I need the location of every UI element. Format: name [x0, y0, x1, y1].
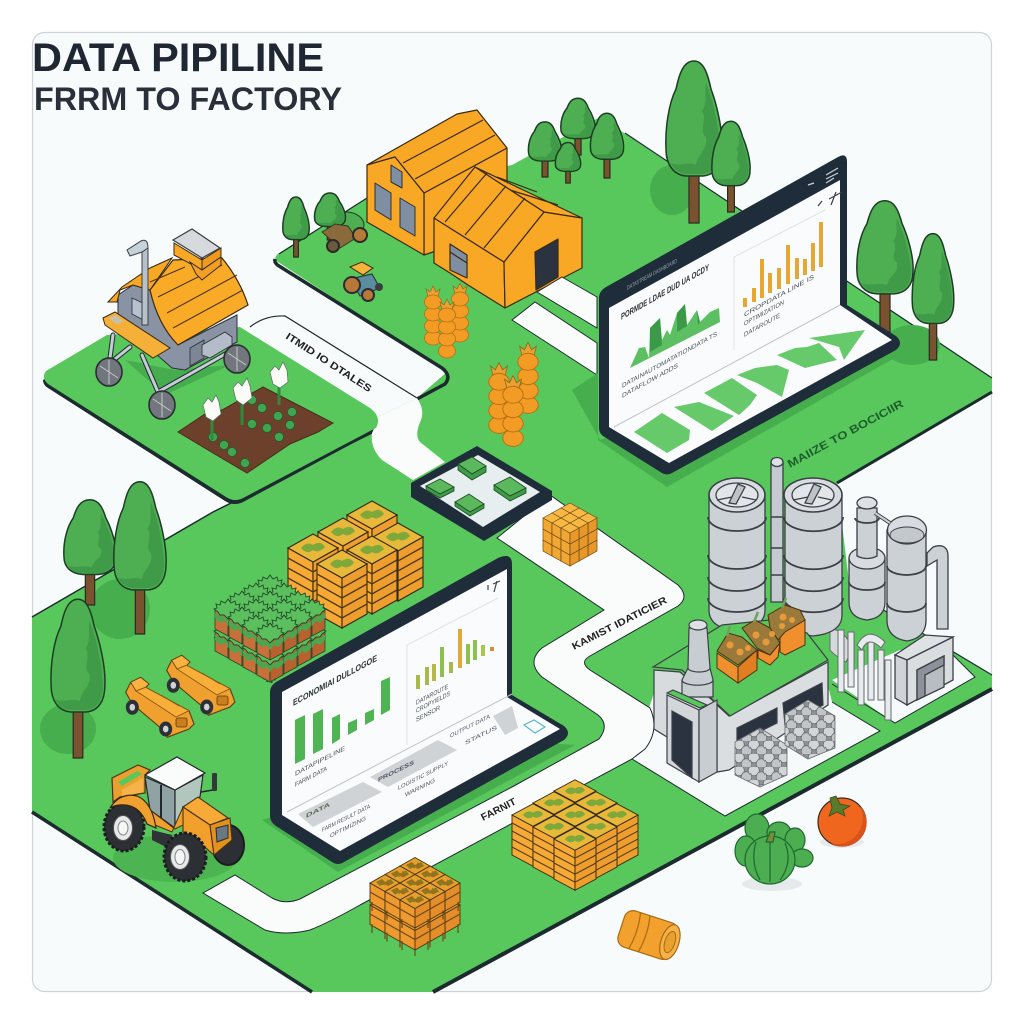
laptop frame — [599, 155, 900, 475]
factory white pads — [632, 650, 975, 816]
road: tray to factory and farm lane — [203, 495, 684, 933]
chart captions: CROPDATA LINE IS — [744, 274, 814, 319]
road label: market: KAMIST IDATICIER — [570, 595, 670, 653]
platform — [103, 312, 170, 358]
barn gable wall — [367, 157, 424, 255]
shed gable wall — [504, 212, 582, 308]
chart captions: DATAROUTE — [416, 684, 448, 707]
trees right — [857, 201, 954, 360]
chart title: ECONOMIAI DULLOGOE — [293, 653, 377, 709]
trees lower left — [51, 482, 166, 758]
laptop dashboard upper right — [572, 155, 905, 487]
elbow pipe — [927, 546, 948, 629]
door module — [667, 695, 699, 782]
chart captions: CROPYIELDS — [416, 690, 450, 715]
green roof — [653, 620, 828, 716]
chart captions — [295, 684, 450, 789]
barn: gabled farm building — [367, 110, 582, 308]
title: DATA PIPILINE — [32, 36, 324, 80]
chart captions: SENSOR — [416, 705, 440, 724]
pad outlines — [632, 655, 975, 816]
laptop screen — [282, 569, 560, 851]
cobble stacks — [735, 700, 835, 787]
soil plot — [178, 362, 333, 473]
rear fender — [110, 795, 156, 828]
shed door — [535, 239, 558, 290]
crates on roof — [717, 598, 805, 683]
chart captions — [622, 274, 814, 400]
wheel legs — [110, 335, 227, 392]
right plant base — [895, 635, 953, 705]
green area chart — [630, 304, 720, 368]
white service lanes at barn — [512, 277, 597, 375]
icon: orange barrel — [615, 908, 684, 963]
cab glass — [145, 777, 175, 828]
icon: cabbage — [735, 814, 813, 891]
icon: tomato — [818, 796, 867, 848]
chimney — [682, 628, 713, 697]
tank two — [784, 478, 843, 636]
land dark edges — [32, 133, 992, 992]
rear wheel — [104, 803, 144, 851]
window icons — [808, 168, 838, 185]
road label: farm lane: FARNIT — [479, 797, 518, 824]
laptop dashboard lower: PROCESS — [378, 759, 414, 784]
main roof — [150, 258, 248, 345]
farm robot house — [96, 229, 250, 419]
laptop dashboard lower: OPTIMIZING — [330, 815, 366, 840]
laptop dashboard lower: STATUS — [465, 724, 497, 747]
eave roof — [108, 258, 172, 302]
hood — [183, 797, 228, 825]
orange cargo vehicles — [126, 655, 235, 737]
tank one — [708, 478, 766, 631]
small orange tractor — [344, 262, 383, 301]
laptop dashboard lower: WARNING — [405, 777, 435, 799]
chart captions: DATAPIPELINE — [295, 745, 345, 778]
header text: DATASTREAM DASHBOARD — [627, 258, 677, 292]
laptop dashboard lower: OUTPUT DATA — [450, 713, 491, 740]
road: farm to sorting tray — [372, 398, 445, 480]
chart captions: DATAROUTE — [744, 312, 780, 339]
window icons — [488, 581, 500, 592]
big tractor — [104, 757, 244, 882]
laptop dashboard lower: FARM RESULT DATA — [322, 803, 371, 834]
house walls — [118, 285, 237, 370]
front wheel — [164, 833, 206, 881]
chart captions: FARM DATA — [295, 765, 327, 789]
wheels — [96, 345, 250, 419]
rear rack — [112, 765, 150, 802]
farm platform — [43, 327, 378, 504]
centre pipe — [771, 458, 783, 602]
road label: farm: ITMID IO DTALES — [283, 331, 374, 395]
laptop dashboard lower — [262, 556, 575, 872]
tree cluster top — [528, 98, 624, 183]
small trees near barn — [283, 193, 364, 257]
chimney pipe — [142, 248, 148, 325]
chart captions: DATAINAUTOMATATIONDATA TS — [622, 331, 717, 390]
shed rear roof — [475, 167, 582, 218]
tank three — [849, 497, 890, 620]
orange bar chart — [745, 222, 821, 307]
hay bale block lower — [512, 780, 638, 890]
silo and processing plant — [708, 458, 953, 720]
roof box — [174, 243, 202, 270]
hay bale stack — [288, 501, 423, 628]
shed main roof — [434, 167, 544, 262]
small tractor behind — [322, 224, 367, 252]
mirror — [201, 790, 213, 792]
green bar chart — [295, 677, 390, 764]
tree shadows — [40, 165, 940, 754]
chart title: PORMDE LDAE DUD UA OCDY — [621, 262, 709, 323]
carrot stacks — [424, 283, 538, 446]
shed side wall — [434, 218, 505, 308]
tank four — [887, 516, 926, 641]
title — [32, 36, 342, 117]
chassis — [150, 807, 183, 832]
laptop dashboard lower: LOGISTIC SUPPLY — [398, 760, 449, 792]
green process tiles — [634, 330, 865, 453]
chart captions: DATAFLOW ADDS — [622, 362, 678, 400]
small blue box — [524, 720, 545, 733]
laptop dashboard lower: DATA — [306, 801, 331, 820]
road label: maize: MAIIZE TO BOCICIIR — [786, 398, 906, 471]
process pipework — [830, 628, 891, 720]
crate stack on lane — [370, 858, 460, 956]
laptop frame — [270, 556, 568, 864]
cab roof — [145, 757, 205, 790]
leafy produce crates — [214, 575, 326, 682]
chart captions: OPTIMIZATION — [744, 299, 784, 328]
tall trees top — [666, 61, 750, 223]
far wheel — [212, 825, 244, 865]
orange cube stack — [543, 503, 597, 566]
subtitle: FRRM TO FACTORY — [34, 81, 342, 117]
mixed bar chart — [418, 629, 492, 689]
barn side wall — [424, 148, 507, 255]
factory building — [653, 620, 828, 782]
barn roof — [367, 110, 507, 193]
sorting tray — [411, 446, 552, 541]
laptop screen — [609, 180, 892, 463]
roll-up doors — [737, 708, 777, 743]
grey info panels — [298, 706, 518, 827]
